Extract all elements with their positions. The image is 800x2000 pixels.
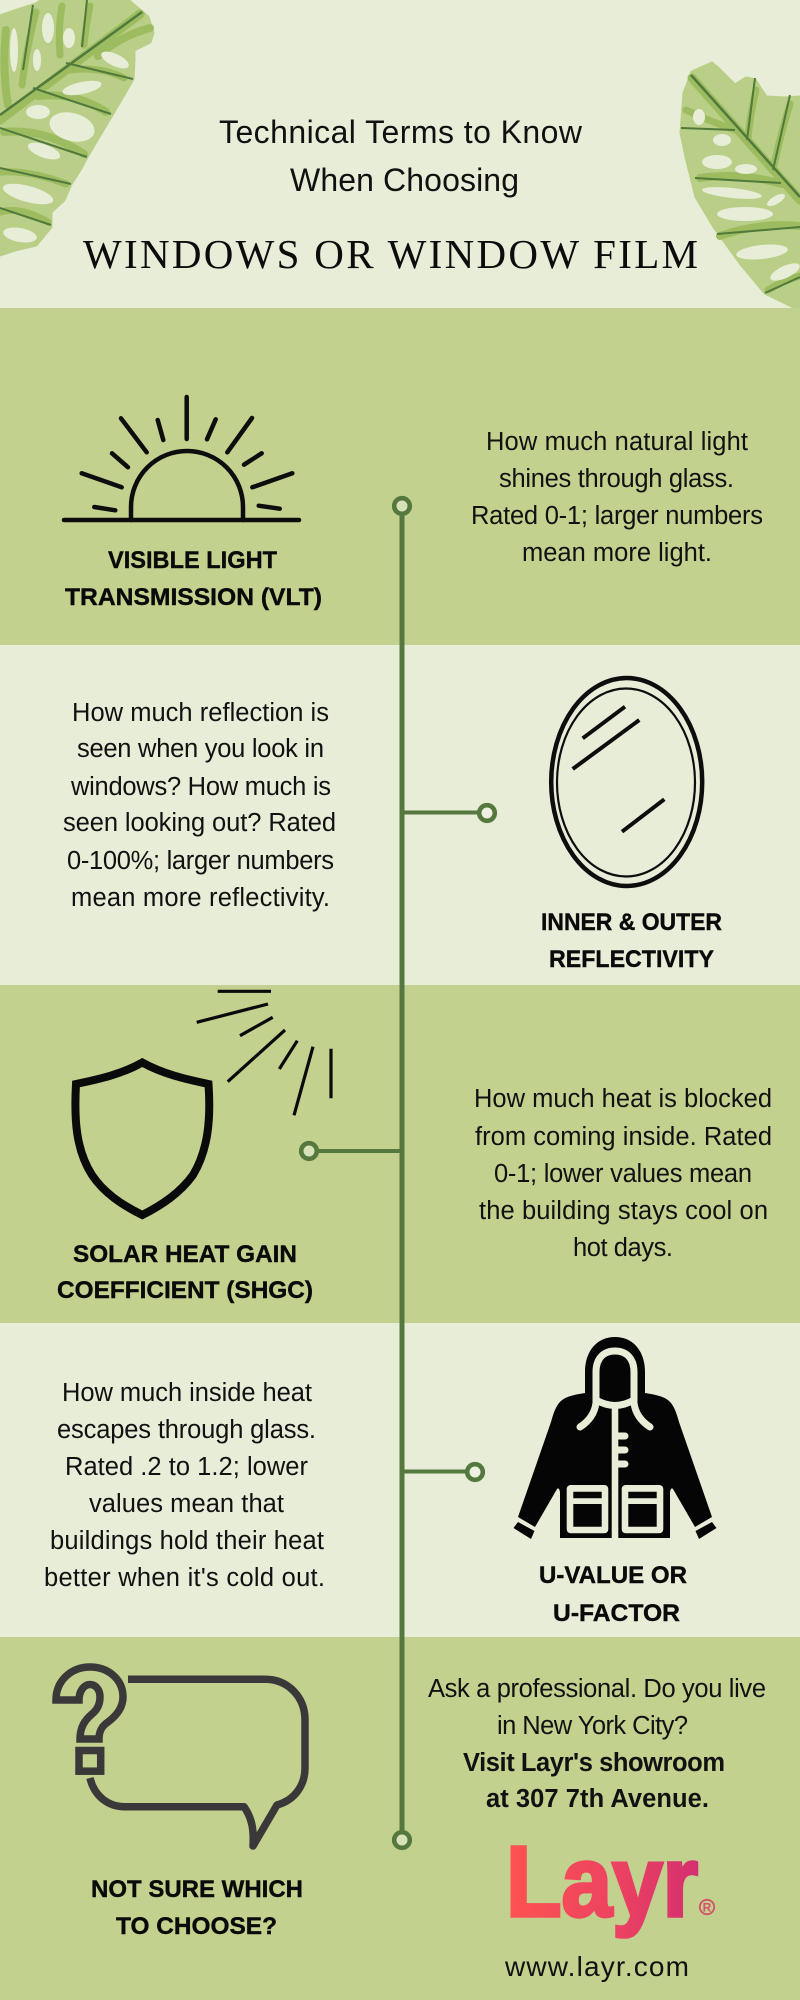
heading: SHGC: SOLAR HEAT GAIN (73, 1241, 297, 1268)
heading: VLT: VISIBLE LIGHT (108, 547, 277, 574)
text: reflectivity description (63, 699, 336, 912)
heading: u-value: U-FACTOR (553, 1600, 680, 1627)
panel: solar heat gain (0, 985, 800, 1323)
text: SHGC description: from coming inside. Rated (475, 1123, 772, 1151)
text: reflectivity description: seen when you look in (77, 735, 324, 763)
heading: reflectivity: INNER & OUTER (541, 909, 722, 936)
heading: VLT: TRANSMISSION (VLT) (65, 584, 322, 611)
panel: header (0, 0, 800, 310)
text: reflectivity description: 0-100%; larger numbers (67, 847, 334, 875)
text: SHGC description (474, 1085, 772, 1262)
heading: reflectivity (541, 909, 722, 973)
text: call to action: in New York City? (497, 1712, 688, 1740)
heading: not sure: NOT SURE WHICH (91, 1876, 303, 1903)
text: VLT description: Rated 0-1; larger numbers (471, 502, 763, 530)
leaf: top right (681, 63, 800, 310)
logo: Layr: Layr (506, 1826, 698, 1938)
text: SHGC description: 0-1; lower values mean (494, 1160, 752, 1188)
panel: visible light transmission (0, 308, 800, 645)
icon: shield with rays (75, 991, 331, 1215)
heading: reflectivity: REFLECTIVITY (549, 946, 714, 973)
title: Technical Terms to Know (219, 114, 583, 150)
text: reflectivity description: seen looking out? Rated (63, 809, 336, 837)
text: call to action: at 307 7th Avenue. (486, 1785, 709, 1813)
text: website: www.layr.com (504, 1951, 689, 1982)
text: VLT description (471, 428, 763, 567)
text: VLT description: How much natural light (486, 428, 748, 456)
icon: jacket (514, 1337, 716, 1541)
text: call to action: Visit Layr's showroom (463, 1749, 725, 1777)
icon: mirror (551, 678, 702, 886)
heading: SHGC: COEFFICIENT (SHGC) (57, 1277, 313, 1304)
heading: u-value: U-VALUE OR (539, 1562, 687, 1589)
text: call to action: Ask a professional. Do you live (428, 1675, 766, 1703)
text: u-value description: escapes through glass. (57, 1416, 316, 1444)
heading: u-value (539, 1562, 687, 1627)
heading: SHGC (57, 1241, 313, 1304)
text: u-value description: buildings hold their heat (50, 1527, 324, 1555)
timeline: vertical spine with connectors (301, 498, 495, 1848)
panel: not sure (0, 1637, 800, 2000)
heading: VLT (65, 547, 322, 611)
text: SHGC description: hot days. (573, 1234, 673, 1262)
icon: sun (64, 397, 299, 520)
text: VLT description: mean more light. (522, 539, 712, 567)
text: reflectivity description: How much reflection is (72, 699, 329, 727)
title (83, 114, 698, 277)
title: WINDOWS OR WINDOW FILM (83, 231, 698, 277)
panel: u-value (0, 1323, 800, 1637)
text: u-value description: better when it's cold out. (44, 1564, 325, 1592)
text: reflectivity description: mean more reflectivity. (71, 884, 330, 912)
logo: Layr: R (703, 1900, 712, 1914)
text: reflectivity description: windows? How much is (70, 773, 331, 801)
heading: not sure (91, 1876, 303, 1940)
panel: reflectivity (0, 645, 800, 985)
text: call to action (428, 1675, 766, 1813)
text: SHGC description: How much heat is blocked (474, 1085, 772, 1113)
icon: speech bubble with question mark (56, 1667, 305, 1846)
text: u-value description (44, 1379, 325, 1592)
text: VLT description: shines through glass. (499, 465, 734, 493)
title: When Choosing (290, 162, 519, 198)
text: u-value description: Rated .2 to 1.2; lower (65, 1453, 308, 1481)
heading: not sure: TO CHOOSE? (116, 1913, 277, 1940)
text: u-value description: values mean that (89, 1490, 284, 1518)
text: SHGC description: the building stays cool on (479, 1197, 768, 1225)
text: u-value description: How much inside heat (62, 1379, 312, 1407)
leaf: top left (0, 0, 153, 255)
